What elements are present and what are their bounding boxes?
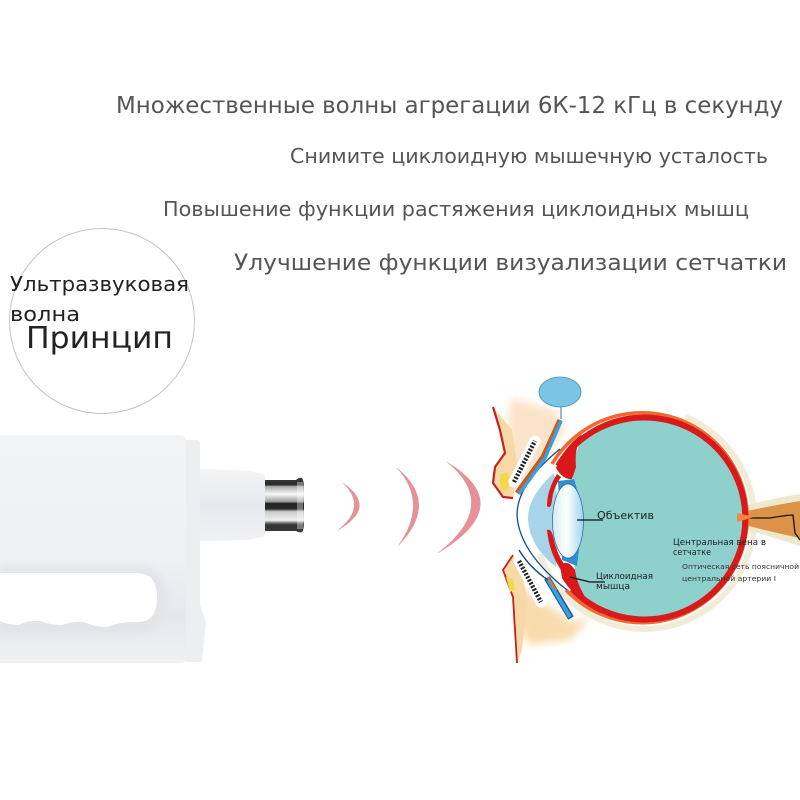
- eye labels: центральной артерии I: [682, 575, 776, 583]
- lower orbital tissue: [516, 585, 590, 645]
- sclera orange ring: [552, 413, 747, 623]
- eye labels: [596, 509, 799, 592]
- upper eyelid muscle: [517, 377, 581, 494]
- ultrasound device: [0, 435, 304, 663]
- pointer lines: [570, 520, 605, 582]
- optic disc notch: [737, 513, 754, 522]
- iris lower: [547, 530, 564, 570]
- eye labels: сетчатке: [673, 548, 711, 558]
- zonule fibres: [558, 479, 580, 566]
- heading line 4: Улучшение функции визуализации сетчатки: [234, 250, 787, 276]
- heading line 2: Снимите циклоидную мышечную усталость: [290, 144, 768, 168]
- eye labels: Циклоидная: [596, 572, 653, 582]
- crystalline lens: [552, 484, 584, 558]
- upper orbital tissue: [508, 398, 566, 492]
- eye anatomy diagram: [493, 377, 800, 663]
- optic nerve: [738, 494, 800, 546]
- small wave: [338, 483, 359, 530]
- outer pale eye wall: [534, 409, 754, 629]
- ultrasound waves: [338, 462, 480, 553]
- device handle opening: [0, 573, 157, 627]
- principle circle with label: Ультразвуковая: [10, 272, 189, 296]
- principle circle with label: Принцип: [26, 321, 173, 356]
- anterior chamber: [528, 473, 560, 567]
- principle circle with label: [10, 228, 194, 414]
- eye labels: Объектив: [597, 509, 654, 522]
- lower eyelid muscle: [519, 550, 571, 618]
- large wave: [438, 462, 480, 553]
- eye labels: Центральная вена в: [673, 538, 766, 548]
- eye labels: мышца: [596, 582, 630, 592]
- heading line 3: Повышение функции растяжения циклоидных мышц: [163, 197, 749, 221]
- device metal tip: [265, 478, 304, 532]
- iris upper: [547, 474, 561, 507]
- cornea line: [517, 449, 567, 590]
- heading line 1: Множественные волны агрегации 6К-12 кГц в секунду: [116, 91, 783, 119]
- device tip highlight: [297, 482, 303, 529]
- upper eyelid: [493, 407, 535, 498]
- medium wave: [397, 468, 419, 546]
- device nozzle: [200, 469, 265, 541]
- vitreous body: [573, 419, 743, 619]
- lower eyelid: [503, 555, 541, 663]
- device body: [0, 435, 186, 663]
- ciliary muscle lower: [560, 563, 592, 606]
- device handle shadow: [0, 566, 166, 634]
- choroid red ring: [558, 417, 745, 619]
- device front cap: [186, 440, 206, 662]
- ciliary muscle upper: [556, 434, 582, 479]
- eye labels: Оптическая сеть поясничной: [682, 563, 799, 571]
- principle circle with label: волна: [10, 302, 80, 326]
